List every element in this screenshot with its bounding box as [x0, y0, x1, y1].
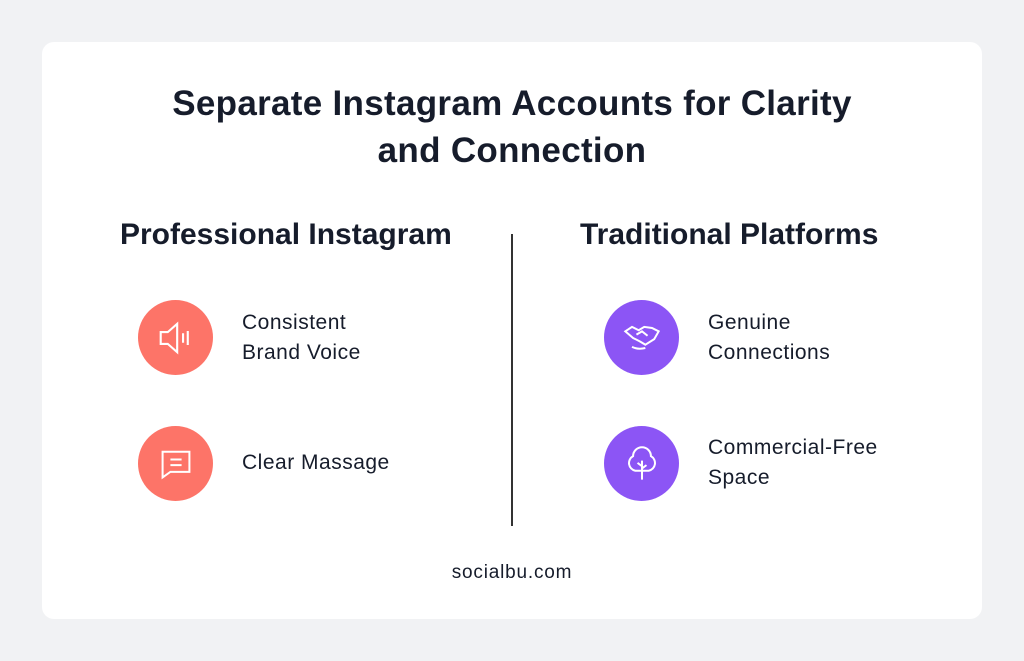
divider: [511, 234, 513, 526]
text: consistent brand voice: Brand Voice: [242, 341, 361, 364]
icon: tree: [604, 426, 679, 501]
text: commercial-free space: [708, 436, 878, 489]
icon: speaker: [138, 300, 213, 375]
text: genuine connections: Connections: [708, 341, 830, 364]
footer: socialbu.com: [452, 562, 572, 583]
icon: chat: [138, 426, 213, 501]
title: Separate Instagram Accounts for Clarity: [172, 84, 852, 123]
text: genuine connections: Genuine: [708, 311, 791, 334]
heading: traditional platforms: Traditional Platforms: [580, 218, 878, 251]
heading: professional instagram: Professional Instagram: [120, 218, 452, 251]
title: [172, 84, 852, 170]
text: genuine connections: [708, 311, 830, 364]
text: consistent brand voice: Consistent: [242, 311, 346, 334]
text: consistent brand voice: [242, 311, 361, 364]
title: and Connection: [378, 131, 646, 170]
text: commercial-free space: Commercial-Free: [708, 436, 878, 459]
text: commercial-free space: Space: [708, 466, 770, 489]
text: clear massage: Clear Massage: [242, 451, 390, 474]
icon: handshake: [604, 300, 679, 375]
